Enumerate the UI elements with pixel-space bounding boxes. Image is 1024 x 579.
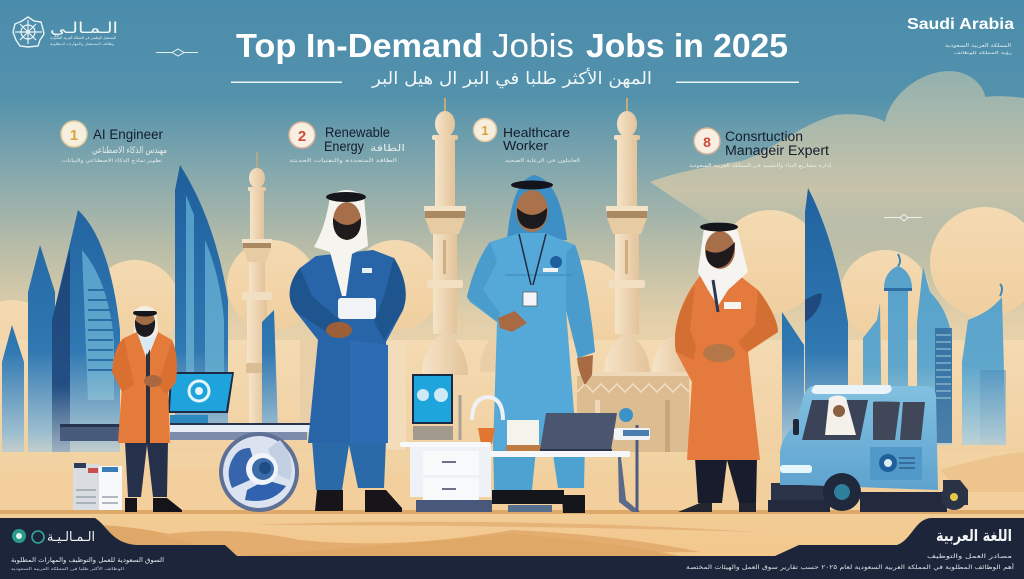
job 4: construction manager: Consrtuction [725,129,803,144]
title: Jobs in 2025 [586,27,788,64]
subtitle arabic: المهن الأكثر طلبا في البر ال هيل البر [371,68,652,89]
person: healthcare worker in light blue [467,175,595,513]
job 3: healthcare worker [474,118,580,164]
minarets centre [422,98,650,375]
mosque building [300,330,692,460]
ornament: right divider [884,214,922,221]
job 2: renewable energy [289,122,405,164]
job 4: construction manager: 8 [703,134,711,150]
subtitle rule right [676,82,799,83]
person: AI engineer in orange coat [112,306,182,512]
footer band [0,518,1024,579]
person: renewable energy worker in blue robe [290,190,406,512]
footer right content: أهم الوظائف المطلوبة في المملكة العربية السعودية لعام ٢٠٢٥ حسب تقارير سوق العمل والهيئات المختصة [686,563,1014,571]
saudi arabia label: رؤية المملكة للوظائف [954,50,1012,55]
peach background domes [0,207,1024,470]
job 2: renewable energy: Energy [324,139,364,154]
company logo [13,17,118,47]
job 1: AI engineer [61,121,167,164]
left minaret [242,152,272,423]
distant cloud [650,71,1024,275]
footer left content: السوق السعودية للعمل والتوظيف والمهارات المطلوبة [11,556,164,564]
job 4: construction manager: Manageir Expert [725,143,829,158]
title: Jobis [492,27,574,64]
footer left content: الـمـالـيـة [47,530,95,545]
subtitle rule left [231,82,342,83]
monitor: AI screen [168,372,234,423]
wheel [219,432,299,512]
healthcare desk [400,374,650,512]
job 2: renewable energy: 2 [298,128,306,145]
job 4: construction manager: إدارة مشاريع البناء والتشييد في المملكة العربية السعودية [689,163,832,169]
job 2: renewable energy: الطاقة المتجددة والتقنيات الحديثة [289,158,397,164]
desert ground [0,452,1024,560]
footer right content: مصادر العمل والتوظيف [927,553,1012,560]
job 4: construction manager [689,128,832,169]
logo tagline second line: وظائف المستقبل والمهارات المطلوبة [50,42,114,46]
truck [768,385,968,512]
footer right content [686,526,1014,571]
job 1: AI engineer: AI Engineer [93,126,163,142]
footer left content: الوظائف الأكثر طلبا في المملكة العربية السعودية [11,566,124,571]
logo tagline: المستقبل الوظيفي في المملكة العربية السعودية [50,35,116,40]
title [236,27,788,64]
job 3: healthcare worker: Healthcare [503,125,570,140]
product box [73,463,122,510]
title: Top In-Demand [236,27,483,64]
job 3: healthcare worker: Worker [503,138,549,153]
table with AI workstation [60,372,317,441]
ornament: left divider [156,49,198,56]
job 3: healthcare worker: 1 [481,123,489,138]
job 1: AI engineer: 1 [70,127,78,144]
logo wordmark: الـمـالـي [50,19,118,38]
job 3: healthcare worker: العاملون في الرعاية الصحية [505,158,580,164]
saudi arabia label: Saudi Arabia [907,16,1014,33]
job 2: renewable energy: Renewable [325,125,390,140]
saudi arabia label [907,16,1014,55]
small blue tower [262,310,278,430]
job 2: renewable energy: الطاقة [370,144,405,154]
job 1: AI engineer: تطوير نماذج الذكاء الاصطناعي والبيانات [62,158,163,164]
saudi arabia label: المملكة العربية السعودية [945,43,1011,49]
skyline: right towers [782,188,1006,445]
job 1: AI engineer: مهندس الذكاء الاصطناعي [92,146,167,156]
person: construction manager in orange robe [675,222,778,512]
skyline: left towers [2,165,228,470]
footer left content [11,529,164,571]
